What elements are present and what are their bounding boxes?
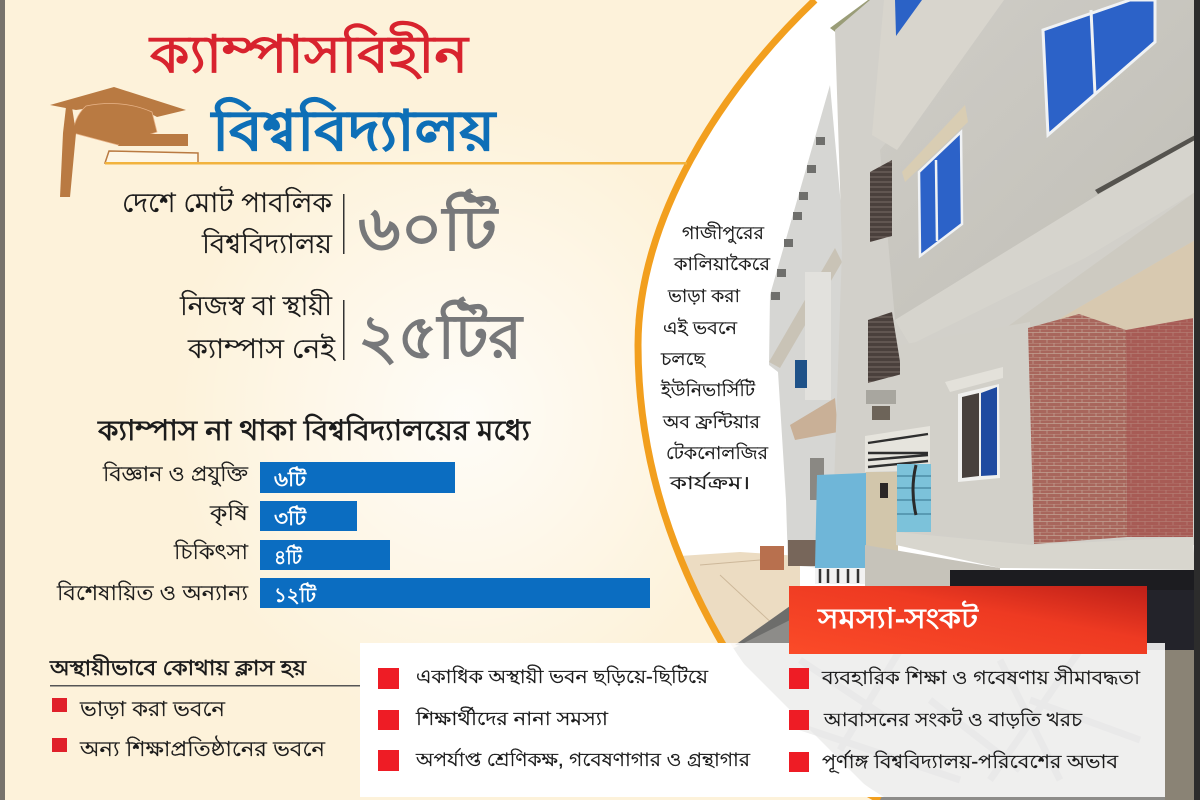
- stat: no own campus: ২৫টির: [358, 296, 524, 372]
- nameplate: [866, 390, 896, 404]
- title rule: [105, 162, 687, 164]
- list: right problems: পূর্ণাঙ্গ বিশ্ববিদ্যালয়-পরিবেশের অভাব: [822, 750, 1118, 773]
- gravel heap: [736, 606, 789, 646]
- main upper wall: [880, 0, 1195, 320]
- photo caption: এই ভবনে: [663, 318, 737, 338]
- bar: specialised and others: [56, 578, 650, 608]
- photo caption: কালিয়াকৈরে: [673, 254, 771, 274]
- louver vents: [870, 160, 892, 242]
- roof edge: [830, 0, 870, 32]
- photo caption: গাজীপুরের: [682, 222, 765, 243]
- stat: no own campus: নিজস্ব বা স্থায়ী: [179, 289, 333, 321]
- bar: agriculture: ৩টি: [274, 505, 307, 530]
- list: right problems: [789, 666, 1141, 773]
- far wing: [769, 85, 845, 570]
- heading box: problems and crisis: [789, 586, 1147, 654]
- stat: total public universities: [122, 186, 499, 264]
- panel: where temporary classes happen: [49, 654, 360, 761]
- bar: medical: চিকিৎসা: [173, 540, 249, 564]
- bar chart heading: ক্যাম্পাস না থাকা বিশ্ববিদ্যালয়ের মধ্যে: [97, 413, 531, 446]
- stat: total public universities: দেশে মোট পাবলিক: [122, 186, 333, 218]
- photo caption: চলছে: [660, 349, 706, 369]
- bottom beam and dark base: [896, 532, 1195, 570]
- bar: specialised and others: ১২টি: [274, 582, 317, 607]
- bar chart: [56, 462, 650, 608]
- list: middle problems: [378, 665, 751, 771]
- photo: rented building inside orange arc: [630, 0, 1200, 800]
- upper right window: [1043, 0, 1155, 135]
- stat: total public universities: ৬০টি: [358, 188, 499, 264]
- list: right problems: ব্যবহারিক শিক্ষা ও গবেষণায় সীমাবদ্ধতা: [821, 666, 1141, 689]
- stat: no own campus: [179, 289, 524, 372]
- photo caption: [660, 222, 771, 493]
- list: right problems: আবাসনের সংকট ও বাড়তি খরচ: [823, 708, 1083, 731]
- list: middle problems: একাধিক অস্থায়ী ভবন ছড়িয়ে-ছিটিয়ে: [416, 665, 709, 688]
- tarp plastic behind panel: [730, 620, 1195, 800]
- bar: science and technology: বিজ্ঞান ও প্রযুক্তি: [102, 462, 249, 486]
- icon: graduation cap on books: [50, 87, 198, 197]
- lower wall: [900, 362, 902, 374]
- middle window: [919, 132, 962, 256]
- bar: agriculture: [209, 501, 357, 531]
- right edge strip: [1194, 0, 1200, 800]
- canopy: [902, 105, 968, 182]
- orange arc: [638, 0, 880, 800]
- title line 1: ক্যাম্পাসবিহীন: [148, 21, 470, 84]
- bar: science and technology: [102, 462, 455, 493]
- gate grille: [865, 426, 930, 472]
- photo caption: ভাড়া করা: [667, 286, 741, 306]
- photo caption: অব ফ্রন্টিয়ার: [662, 411, 761, 432]
- lower window: [958, 384, 1000, 482]
- central tower and wall backing: [832, 0, 1195, 545]
- brick infill: [1028, 314, 1127, 544]
- bar: specialised and others: বিশেষায়িত ও অন্যান্য: [56, 581, 249, 605]
- panel: where temporary classes happen: ভাড়া করা ভবনে: [79, 698, 225, 721]
- list: middle problems: শিক্ষার্থীদের নানা সমস্যা: [415, 707, 609, 730]
- sandy ground: [683, 552, 800, 646]
- stat: no own campus: ক্যাম্পাস নেই: [187, 333, 336, 364]
- main floor slab: [895, 135, 1195, 345]
- bar: medical: [173, 540, 390, 570]
- panel: white list background: [360, 643, 1165, 797]
- list: middle problems: অপর্যাপ্ত শ্রেণিকক্ষ, গবেষণাগার ও গ্রন্থাগার: [415, 748, 751, 771]
- heading box: problems and crisis: সমস্যা-সংকট: [817, 600, 980, 634]
- photo caption: কার্যক্রম।: [669, 472, 750, 493]
- bar: medical: ৪টি: [274, 544, 303, 569]
- bar: agriculture: কৃষি: [209, 501, 248, 526]
- bar: science and technology: ৬টি: [274, 466, 307, 491]
- top slab: [886, 4, 1001, 150]
- photo caption: ইউনিভার্সিটি: [660, 379, 756, 400]
- photo caption: টেকনোলজির: [666, 442, 769, 463]
- stat: total public universities: বিশ্ববিদ্যালয়: [201, 228, 333, 259]
- title line 2: বিশ্ববিদ্যালয়: [210, 97, 497, 162]
- panel: where temporary classes happen: অন্য শিক্ষাপ্রতিষ্ঠানের ভবনে: [79, 736, 325, 761]
- entrance door and cyan gate: [866, 472, 898, 551]
- panel: where temporary classes happen: অস্থায়ীভাবে কোথায় ক্লাস হয়: [49, 654, 308, 680]
